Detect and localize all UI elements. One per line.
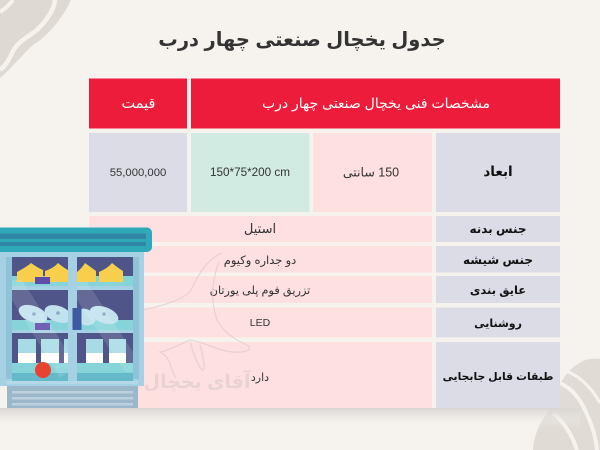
row: adjustable shelves [89,342,560,408]
width value cell [313,133,432,212]
row: glass type [89,246,560,272]
row: body material: جنس بدنه [469,222,527,236]
row: body material: استیل [244,221,276,236]
width value cell: 150 سانتی [343,166,399,180]
row: body material [89,216,560,242]
red ball [35,362,51,378]
cheese [17,263,123,282]
header: price: قیمت [122,96,155,112]
price value cell: 55,000,000 [110,167,166,179]
row: glass type: دو جداره وکیوم [224,255,296,268]
door frames and glass [6,256,139,381]
watermark: آقای یخچال [144,369,251,393]
header: specifications: مشخصات فنی یخچال صنعتی چهار درب [262,95,490,112]
row: insulation: عایق بندی [470,285,526,297]
row: lighting: LED [250,317,271,329]
dimensions value cell [191,133,310,212]
row: lighting [89,308,560,338]
row: glass type: جنس شیشه [463,253,533,267]
price value cell [89,133,187,212]
milk cartons [18,339,126,363]
table [89,78,560,408]
fish [16,301,121,328]
header: price [89,78,187,128]
title: جدول یخچال صنعتی چهار درب [158,29,446,51]
row: adjustable shelves: دارد [251,372,269,384]
table shadow [0,408,580,428]
fridge base [7,386,138,408]
row: lighting: روشنایی [474,318,522,330]
label: dimensions [436,133,560,212]
decoration: top-left leaf [0,0,71,78]
row: insulation [89,276,560,303]
purple boxes [35,277,50,330]
dimensions value cell: 150*75*200 cm [210,166,290,179]
row: adjustable shelves: طبقات قابل جابجایی [443,371,553,383]
fridge body [0,252,144,386]
label: dimensions: ابعاد [483,164,513,179]
header: specifications [191,78,560,128]
icon: refrigerator [0,228,152,408]
fridge top bar [0,228,152,252]
shelves [12,276,133,381]
door handle [72,308,82,330]
row: insulation: تزریق فوم پلی یورتان [210,285,310,298]
watermark [143,253,251,393]
decoration: bottom-right leaf [533,358,600,450]
